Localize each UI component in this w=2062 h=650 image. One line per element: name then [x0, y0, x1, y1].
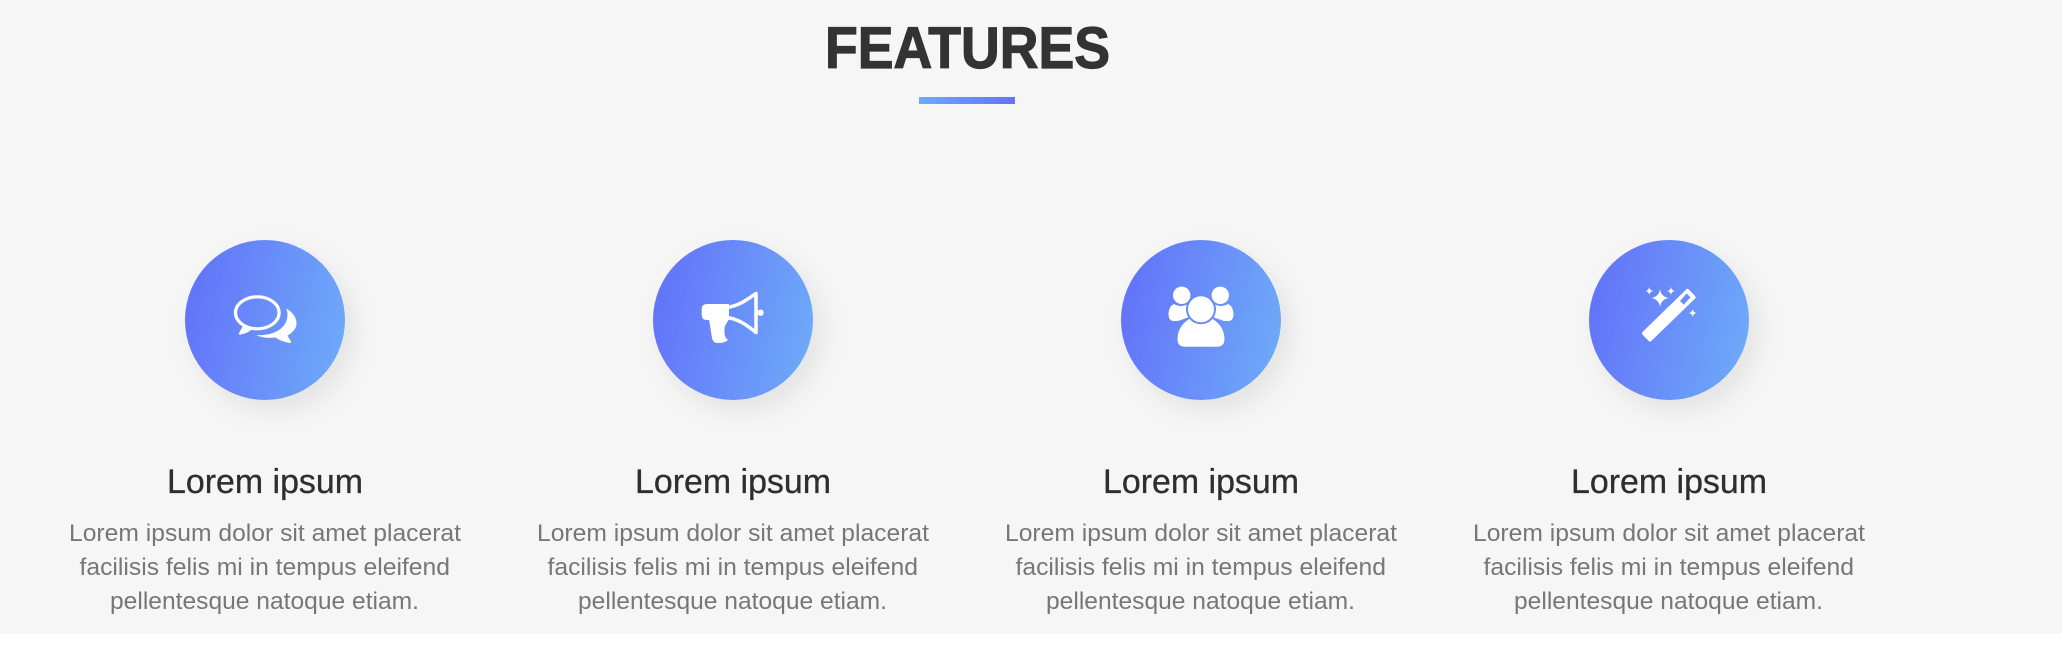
panel: feature 3 [1005, 240, 1397, 615]
description 4 [1473, 520, 1865, 615]
description 3: pellentesque natoque etiam. [1046, 588, 1355, 615]
panel: feature 4 [1473, 240, 1865, 615]
panel: feature 2 [537, 240, 929, 615]
icon: magic wand [1644, 287, 1697, 340]
description 3: facilisis felis mi in tempus eleifend [1016, 554, 1386, 581]
heading 1: Lorem ipsum [167, 463, 363, 501]
description 2: Lorem ipsum dolor sit amet placerat [537, 520, 929, 547]
description 1: facilisis felis mi in tempus eleifend [80, 554, 450, 581]
description 2 [537, 520, 929, 615]
description 2: pellentesque natoque etiam. [578, 588, 887, 615]
description 4: facilisis felis mi in tempus eleifend [1484, 554, 1854, 581]
icon: chat bubbles [235, 297, 296, 343]
icon circle 1 [185, 240, 345, 400]
description 4: Lorem ipsum dolor sit amet placerat [1473, 520, 1865, 547]
description 2: facilisis felis mi in tempus eleifend [548, 554, 918, 581]
title underline [919, 97, 1015, 104]
description 3 [1005, 520, 1397, 615]
icon circle 3 [1121, 240, 1281, 400]
description 1: pellentesque natoque etiam. [110, 588, 419, 615]
icon circle 4 [1589, 240, 1749, 400]
title: FEATURES [825, 16, 1110, 81]
description 4: pellentesque natoque etiam. [1514, 588, 1823, 615]
icon: group of people [1168, 287, 1234, 347]
heading 3: Lorem ipsum [1103, 463, 1299, 501]
panel: feature 1 [69, 240, 461, 615]
icon circle 2 [653, 240, 813, 400]
description 3: Lorem ipsum dolor sit amet placerat [1005, 520, 1397, 547]
heading 4: Lorem ipsum [1571, 463, 1767, 501]
description 1: Lorem ipsum dolor sit amet placerat [69, 520, 461, 547]
description 1 [69, 520, 461, 615]
icon: megaphone [702, 294, 764, 343]
heading 2: Lorem ipsum [635, 463, 831, 501]
